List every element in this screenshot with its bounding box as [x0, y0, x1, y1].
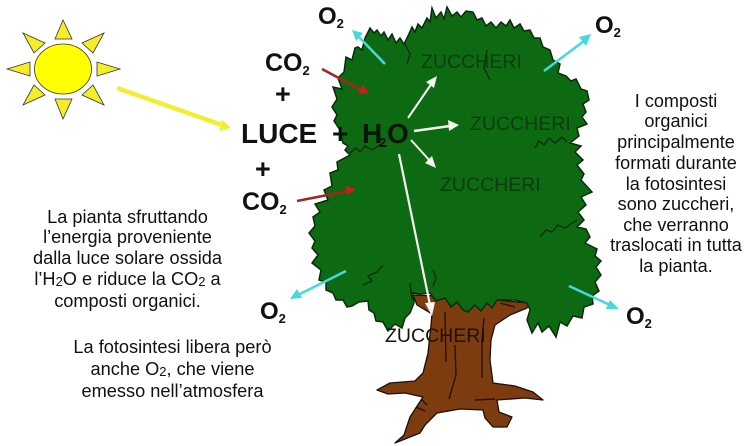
label: plus lower: +	[255, 154, 271, 184]
crown inner lobes	[350, 44, 577, 300]
labels: O2: O	[595, 12, 614, 39]
label: plus H2O: +	[332, 118, 348, 149]
labels: O2: 2	[645, 316, 652, 331]
illustration: tree	[309, 7, 601, 443]
text: left explanation: O e riduce la CO	[63, 269, 198, 289]
text: right explanation: la pianta.	[639, 256, 713, 276]
label: CO2 bottom: CO	[242, 188, 280, 216]
text: right explanation: organici	[644, 111, 708, 131]
label: CO2 top: CO	[265, 49, 302, 77]
bark lines	[416, 303, 515, 411]
labels: O2: 2	[337, 16, 344, 31]
label: plus H2O: O	[387, 118, 409, 149]
label: plus H2O: 2	[379, 135, 386, 150]
labels: ZUCCHERI: ZUCCHERI	[470, 113, 571, 135]
labels: O2: O	[318, 3, 337, 30]
text: oxygen note: 2	[159, 364, 167, 379]
arrows: O2 released	[290, 30, 619, 309]
tree trunk	[377, 295, 543, 443]
text: right explanation	[610, 91, 743, 276]
text: oxygen note: , che viene	[167, 359, 254, 379]
text: oxygen note: emesso nell’atmosfera	[82, 381, 264, 401]
text: oxygen note: La fotosintesi libera però	[73, 337, 272, 357]
label: CO2 bottom: 2	[280, 202, 287, 217]
labels: ZUCCHERI	[385, 51, 571, 347]
text: left explanation: composti organici.	[54, 291, 201, 311]
text: left explanation: l’H	[34, 269, 56, 289]
text: oxygen note: anche O	[91, 359, 159, 379]
labels: O2: 2	[614, 25, 621, 40]
tree crown	[309, 7, 601, 337]
arrow: CO2 in, bottom	[297, 186, 356, 201]
labels: O2: 2	[279, 311, 286, 326]
text: right explanation: sono zuccheri,	[618, 194, 734, 214]
label: plus: +	[275, 79, 291, 109]
text: left explanation: dalla luce solare ossida	[33, 248, 223, 268]
text: left explanation: 2	[198, 274, 205, 289]
text: right explanation: principalmente	[617, 132, 735, 152]
text: right explanation: la fotosintesi	[626, 174, 726, 194]
labels: ZUCCHERI: ZUCCHERI	[421, 51, 522, 73]
text: left explanation	[33, 207, 223, 311]
text: right explanation: traslocati in tutta	[610, 235, 743, 255]
labels: O2	[260, 3, 652, 331]
label: plus H2O	[332, 118, 409, 150]
arrow: CO2 in, top	[322, 69, 369, 94]
text: left explanation: l’energia proveniente	[43, 227, 212, 247]
text: right explanation: I composti	[635, 91, 717, 111]
label: plus H2O: H	[362, 118, 382, 149]
arrow: sunlight to LUCE	[117, 88, 231, 131]
arrows: sugars from H2O	[399, 76, 459, 316]
label: LUCE: LUCE	[241, 118, 317, 149]
labels: O2: O	[260, 298, 279, 325]
text: right explanation: formati durante	[615, 153, 737, 173]
label: CO2 top: 2	[302, 63, 310, 78]
labels: ZUCCHERI: ZUCCHERI	[440, 174, 541, 196]
text: left explanation: 2	[56, 274, 63, 289]
text: left explanation: a	[205, 269, 222, 289]
labels: O2: O	[626, 303, 645, 330]
text: right explanation: che verranno	[623, 215, 729, 235]
text: oxygen note	[73, 337, 272, 401]
text: left explanation: La pianta sfruttando	[47, 207, 208, 227]
labels: ZUCCHERI: ZUCCHERI	[385, 325, 486, 347]
icon: sun	[7, 20, 120, 119]
